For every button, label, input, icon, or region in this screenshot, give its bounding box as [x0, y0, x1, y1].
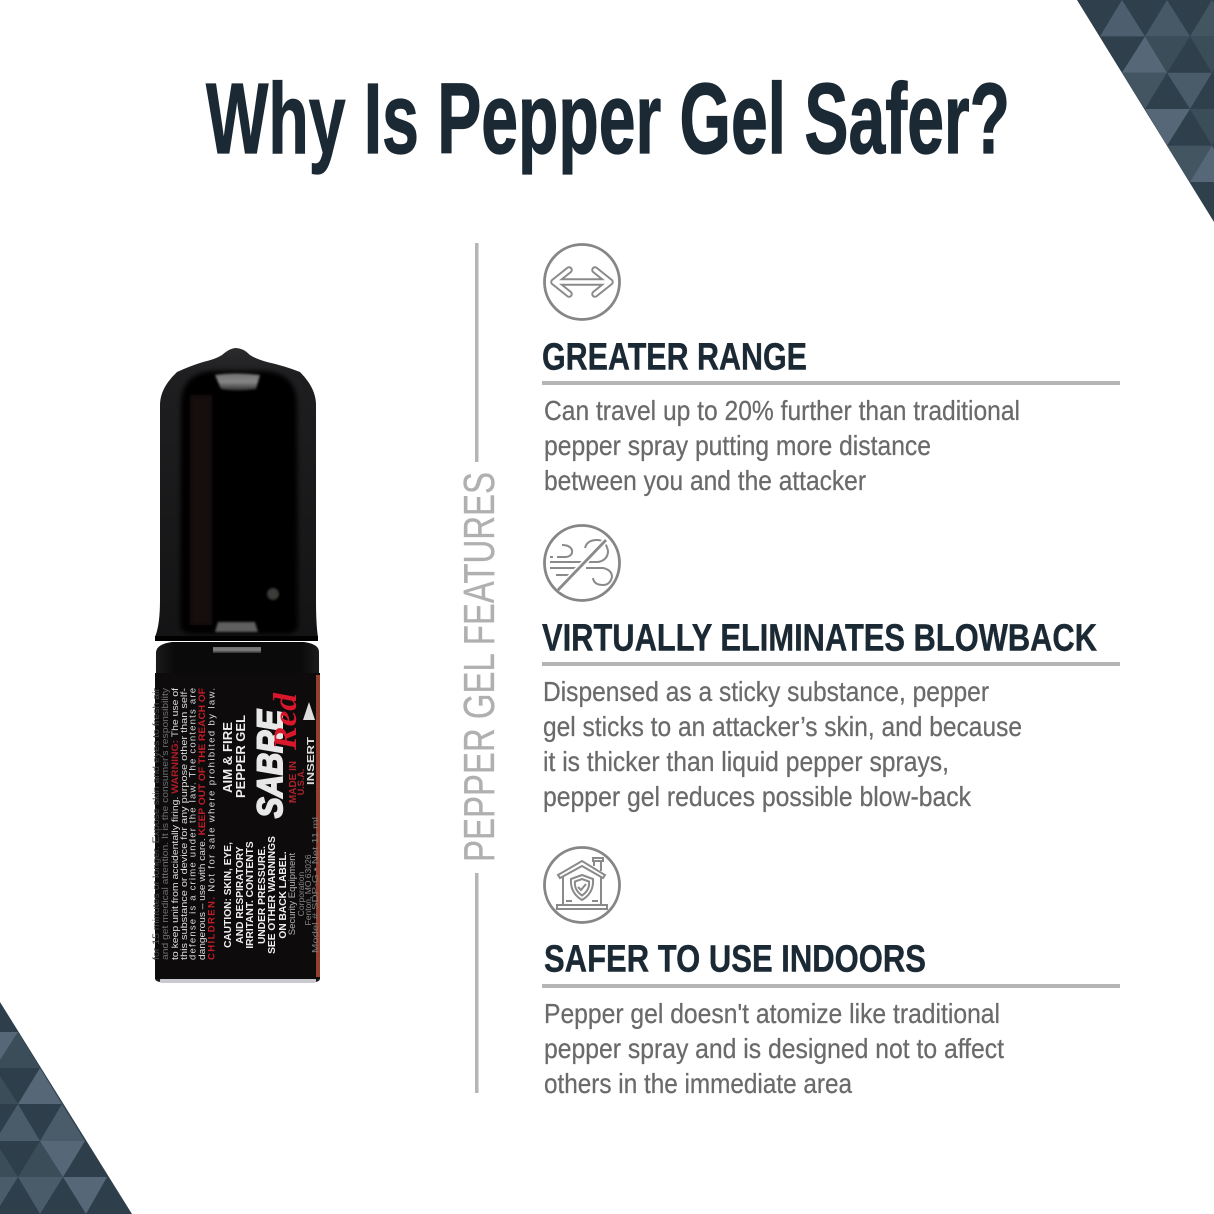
description: Dispensed as a sticky substance, pepper: [543, 676, 989, 707]
label: CHILDREN. Not for sale where prohibited by law.: [206, 688, 218, 960]
product name: AIM & FIRE: [220, 722, 235, 793]
description: Pepper gel doesn't atomize like traditional: [544, 998, 1000, 1029]
decorative corner: bottom left triangles: [0, 995, 140, 1214]
label: AND RESPIRATORY: [235, 846, 246, 944]
description: pepper spray putting more distance: [544, 430, 931, 461]
brand logo: SABRE: [251, 709, 290, 818]
manufacturer: Security Equipment: [287, 852, 298, 935]
description: it is thicker than liquid pepper sprays,: [543, 746, 949, 777]
label: [151, 673, 320, 979]
description: others in the immediate area: [544, 1068, 853, 1099]
heading: SAFER TO USE INDOORS: [544, 938, 926, 980]
label: PEPPER GEL: [233, 715, 248, 798]
label: Red: [268, 692, 304, 751]
product: pepper gel canister: [151, 348, 320, 983]
label: UNDER PRESSURE.: [257, 846, 268, 944]
icon: no wind: [544, 526, 620, 600]
label: U.S.A.: [296, 769, 306, 795]
description: Can travel up to 20% further than traditional: [544, 395, 1020, 426]
description: [544, 395, 1020, 496]
description: pepper spray and is designed not to affect: [544, 1033, 1004, 1064]
description: [544, 998, 1004, 1099]
heading: GREATER RANGE: [542, 336, 807, 378]
small print: for 15 minutes or longer. Expose skin and eyes to fresh air: [151, 688, 162, 960]
icon: house with shield: [544, 848, 620, 922]
insert arrow: [303, 702, 315, 720]
side label: pepper gel features: [455, 243, 504, 1093]
label: this substance or device for any purpose other than self-: [179, 688, 190, 960]
label: INSERT: [305, 736, 317, 785]
protective cap: [155, 348, 318, 641]
label: Model # SDP-G • Net 11 ml: [311, 817, 320, 953]
icon: double arrow: [544, 244, 620, 320]
label: Fenton, MO 63026: [303, 854, 313, 925]
side label: pepper gel features: PEPPER GEL FEATURES: [455, 472, 504, 862]
label: to keep unit from accidentally firing. WARNING: The use of: [170, 688, 181, 960]
label: IRRITANT. CONTENTS: [245, 841, 256, 949]
description: between you and the attacker: [544, 465, 866, 496]
label: SEE OTHER WARNINGS: [267, 836, 278, 954]
description: [543, 676, 1022, 812]
canister body: [155, 642, 320, 982]
label: ON BACK LABEL.: [278, 851, 289, 939]
label: Corporation: [296, 872, 306, 916]
heading: VIRTUALLY ELIMINATES BLOWBACK: [542, 618, 1097, 660]
label: defense is a crime under the law. The contents are: [188, 688, 198, 960]
description: pepper gel reduces possible blow-back: [543, 781, 971, 812]
label: and get medical attention. It is the consumer's responsibility: [160, 688, 171, 960]
description: gel sticks to an attacker’s skin, and because: [543, 711, 1022, 742]
feature: virtually eliminates blowback: [542, 526, 1120, 812]
decorative corner: top right triangles: [1070, 0, 1214, 225]
label: MADE IN: [288, 761, 299, 803]
caution text: CAUTION: SKIN, EYE,: [223, 842, 234, 948]
feature: safer to use indoors: [542, 848, 1120, 1099]
label: dangerous – use with care. KEEP OUT OF THE REACH OF: [197, 688, 208, 960]
feature: greater range: [542, 244, 1120, 496]
